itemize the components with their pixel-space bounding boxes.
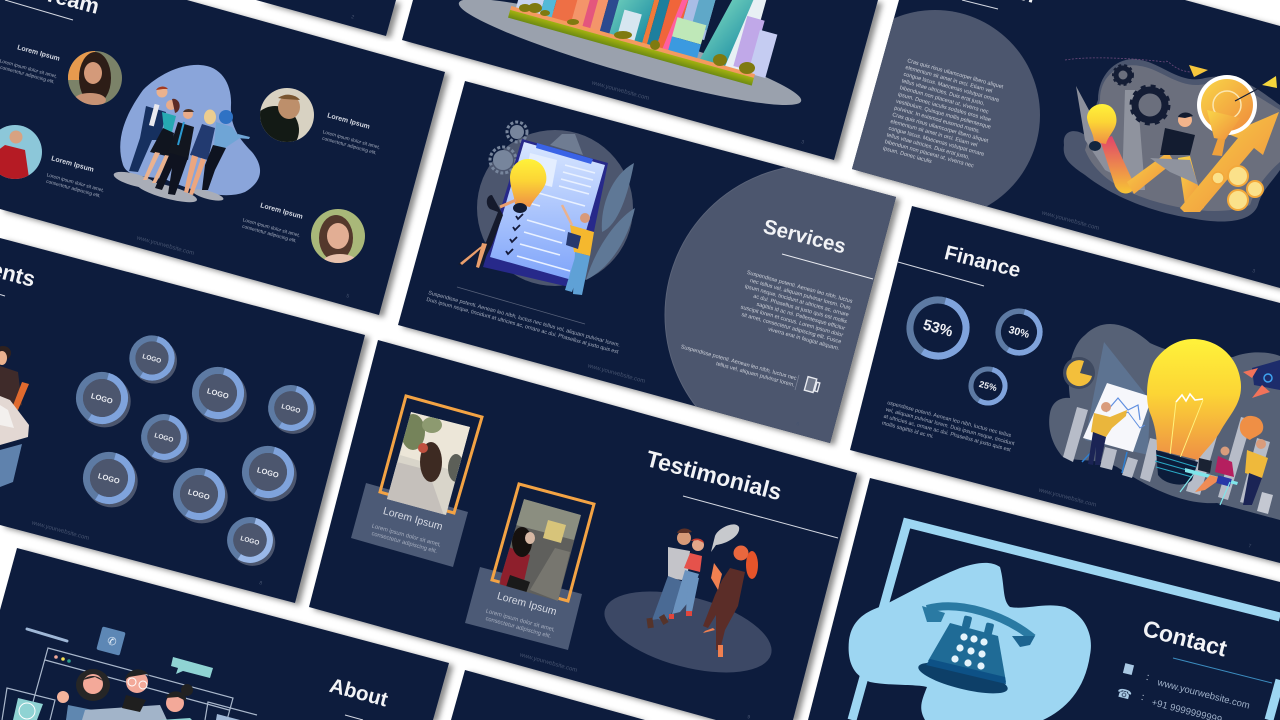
label: person left: consectetur adipiscing elit. [45,179,101,199]
photo: man in red [0,125,42,179]
label: person top left [0,44,61,85]
paragraph [882,58,1004,178]
website label: www.yourwebsite.com [1040,210,1100,232]
logos [73,333,322,571]
label: person right [321,112,381,156]
label: person right: consectetur adipiscing elit. [321,136,377,156]
rocket [1252,360,1280,390]
logo badge 1 [127,333,182,389]
orange legs [1127,152,1174,194]
paragraph: ipsum. Donec iaculis [882,146,933,165]
paragraph: viverra erat in feugiat aliquam. [767,327,840,352]
bulb [1147,339,1241,460]
panel: team slide [0,0,445,315]
label: person bottom right: Lorem ipsum dolor sit amet, [242,217,301,239]
photo: woman [68,51,122,105]
title: Testimonials [644,445,784,505]
gray circle [664,167,896,443]
contact row: phone [1115,685,1223,720]
paragraph: elementum sit amet in orci. Etiam vel [905,65,993,95]
paragraph: Cras quis risus ullamcorper libero aliquet [892,112,989,145]
logo badge 4: LOGO [280,403,301,415]
testimonial card 1: Lorem ipsum dolor sit amet, [371,524,442,549]
panel: target slide [830,0,1280,288]
panel: testimonials slide [309,340,857,720]
pie [1063,357,1095,389]
testimonial card 2: consectetur adipiscing elit. [485,616,552,640]
paragraph: sagittis id ac mi. Pellentesque efficitur [756,302,846,332]
logo badge 7 [170,465,234,529]
paragraph: ipsum neque, tincidunt at ultricies ac, ornare [744,284,849,318]
paragraph: pulvinar. In euismod euismod mattis. [893,105,981,135]
paragraph: nec tellus vel, aliquam pulvinar lorem. Duis [749,278,851,312]
label: person top left: Lorem ipsum dolor sit amet, [0,58,58,80]
illustration: clipboard with bulb [458,122,635,295]
whiteboard [1083,383,1152,452]
icon: telephone [916,606,1035,700]
illustration: bulb and team [1049,324,1280,520]
testimonial card 1: consectetur adipiscing elit. [371,531,438,555]
desk people [1215,456,1234,477]
panel: partial slide top left [256,0,396,36]
panel: about slide [0,548,449,720]
ellipse: city shadow [453,0,807,121]
coins [1228,166,1248,186]
blue blob [120,65,260,195]
paragraph: congue lacus. Maecenas volutpat ornare [888,126,985,158]
target [1197,75,1257,135]
panel: city slide [402,0,878,160]
paragraph: mollis sagittis id ac mi. [881,420,934,440]
testimonial card 1: Lorem Ipsum [382,505,444,533]
speech bubble [1240,416,1263,440]
panel: services slide: 6 [795,421,800,428]
testimonial card 1 [351,396,482,567]
frame [852,523,1280,720]
contact row: website [1123,663,1251,712]
note with icon: tellus vel, aliquam pulvinar lorem. [715,361,796,389]
text: under clipboard: Duis ipsum neque, tincidunt at ultricies ac, ornare ac dui. Phasellus at justo quis est [426,297,620,356]
gears [1135,90,1165,120]
testimonial card 2: Lorem Ipsum [496,590,558,618]
paragraph: congue lacus. Maecenas volutpat ornare [903,72,1000,104]
illustration: runner with trophy and arrow [1064,58,1280,222]
illustration: video call team: ✆ [106,635,118,649]
paragraph: suscipit lorem et cursus. Lorem ipsum dolor [740,305,844,339]
donut: 53% [904,294,972,362]
panel: partial slide top left: 2 [350,14,355,21]
website label: www.yourwebsite.com [518,652,578,674]
contact row: website: : [1145,672,1150,683]
donut: 53%: 53% [921,316,955,341]
logo badge 6 [80,449,144,513]
label: person bottom right [241,202,304,244]
contact row: phone: : [1140,692,1145,703]
paper plane and dart [1189,65,1208,77]
note with icon [678,344,821,394]
logo badge 9: LOGO [239,535,260,547]
paragraph [733,270,854,352]
logo badge 9 [224,515,281,571]
panel: clients slide [0,238,365,603]
logo badge 2 [73,369,137,433]
donut: 25%: 25% [978,379,998,393]
man [1160,128,1195,155]
testimonial card 2: Lorem ipsum dolor sit amet, [485,609,556,634]
website label: www.yourwebsite.com [586,363,646,385]
trees [519,3,755,74]
note with icon: Suspendisse potenti. Aenean leo nibh, luctus nec [680,344,797,382]
panel: finance slide: 7 [1247,543,1252,550]
label: person left: Lorem Ipsum [50,155,95,174]
arrow [1180,112,1279,212]
panel: finance slide [850,206,1280,563]
photo: laughing man [260,88,314,142]
logo badge 2: LOGO [90,391,114,406]
paragraph: elementum sit amet in orci. Etiam vel [890,119,978,149]
paragraph: ac dui. Phasellus at justo quis est mollis [752,293,848,325]
logo badge 6: LOGO [97,471,121,486]
paragraph: ipsum. Donec iaculis sodales eros vitae [897,92,992,123]
logo badge 8: LOGO [256,465,280,480]
ground shadows [112,169,158,191]
illustration: city skyline [508,0,789,89]
paragraph: vestibulum. Quisque mollis pellentesque [895,99,991,131]
website label: www.yourwebsite.com [590,80,650,102]
panel: contact slide [808,478,1280,720]
label: person left [45,155,105,199]
illustration: video call team [2,626,257,720]
logo badge 8 [239,443,303,507]
label: person bottom right: Lorem Ipsum [259,202,304,221]
label: person top left: consectetur adipiscing elit. [0,65,55,85]
paragraph [881,400,1017,461]
contact row: phone: ☎ [1115,685,1133,703]
text: under clipboard: Suspendisse potenti. Aenean leo nibh, luctus nec tellus vel, aliquam pulvinar lorem. [427,290,621,349]
panel: clients slide: 8 [258,580,263,587]
photo: smiling woman [311,209,365,263]
paragraph: vel, aliquam pulvinar lorem. Duis ipsum neque, tincidunt [885,407,1015,447]
donut: 30%: 30% [1007,324,1031,341]
paragraph: tellus vitae ultricies. Duis erat justo, [886,132,971,161]
paragraph: Cras quis risus ullamcorper libero aliquet [906,58,1004,91]
website label: www.yourwebsite.com [30,520,90,542]
logo badge 1: LOGO [142,353,162,365]
illustration: seated person at desk [0,346,29,487]
contact row: website: www.yourwebsite.com [1155,677,1251,712]
logo badge 3 [189,364,253,428]
donut: 30% [994,307,1044,357]
logo badge 5: LOGO [153,432,174,444]
panel: team slide: 5 [345,293,350,300]
gray circle [852,10,1040,206]
title: Contact [1140,615,1230,662]
title: Finance [942,241,1023,282]
label: person left: Lorem ipsum dolor sit amet, [46,172,105,194]
paragraph: sit amet, consectetur adipiscing elit. Fusce [741,312,842,345]
illustration: three people talking [646,524,758,657]
illustration: team people [129,86,250,195]
title: About [327,674,390,712]
pink strip and bulb [1100,136,1135,194]
man at board [1091,410,1127,437]
panel: city slide: 3 [800,139,805,146]
title: Services [761,215,848,258]
donut: 25% [967,365,1009,407]
paragraph: bibendum non placerat ut, viverra nec [884,139,975,170]
blob [849,563,1091,720]
testimonial card 2 [465,484,594,650]
paragraph: tellus vitae ultricies. Duis erat justo, [901,78,986,107]
logo badge 3: LOGO [206,386,230,401]
panel: partial slide bottom center [451,670,645,720]
label: person bottom right: consectetur adipiscing elit. [241,224,297,244]
website label: www.yourwebsite.com [1037,487,1097,509]
website label: www.yourwebsite.com [135,235,195,257]
label: person right: Lorem Ipsum [326,112,371,131]
logo badge 7: LOGO [187,487,211,502]
label: person right: Lorem ipsum dolor sit amet, [322,129,381,151]
paragraph: Suspendisse potenti. Aenean leo nibh, luctus [746,270,853,305]
ellipse: floor [596,576,780,688]
logo badge 5 [138,412,195,468]
paragraph: at ultricies ac, ornare ac dui. Phasellus at justo quis est [883,414,1012,454]
panel: target slide: 3 [1251,268,1256,275]
logo badge 4 [265,383,322,439]
paragraph: uspendisse potenti. Aenean leo nibh, luctus nec tellus [886,400,1012,439]
label: person top left: Lorem Ipsum [16,44,61,63]
panel: services slide [398,80,904,448]
icon: calculator [804,377,821,394]
paragraph: bibendum non placerat ut, viverra nec [899,85,990,116]
